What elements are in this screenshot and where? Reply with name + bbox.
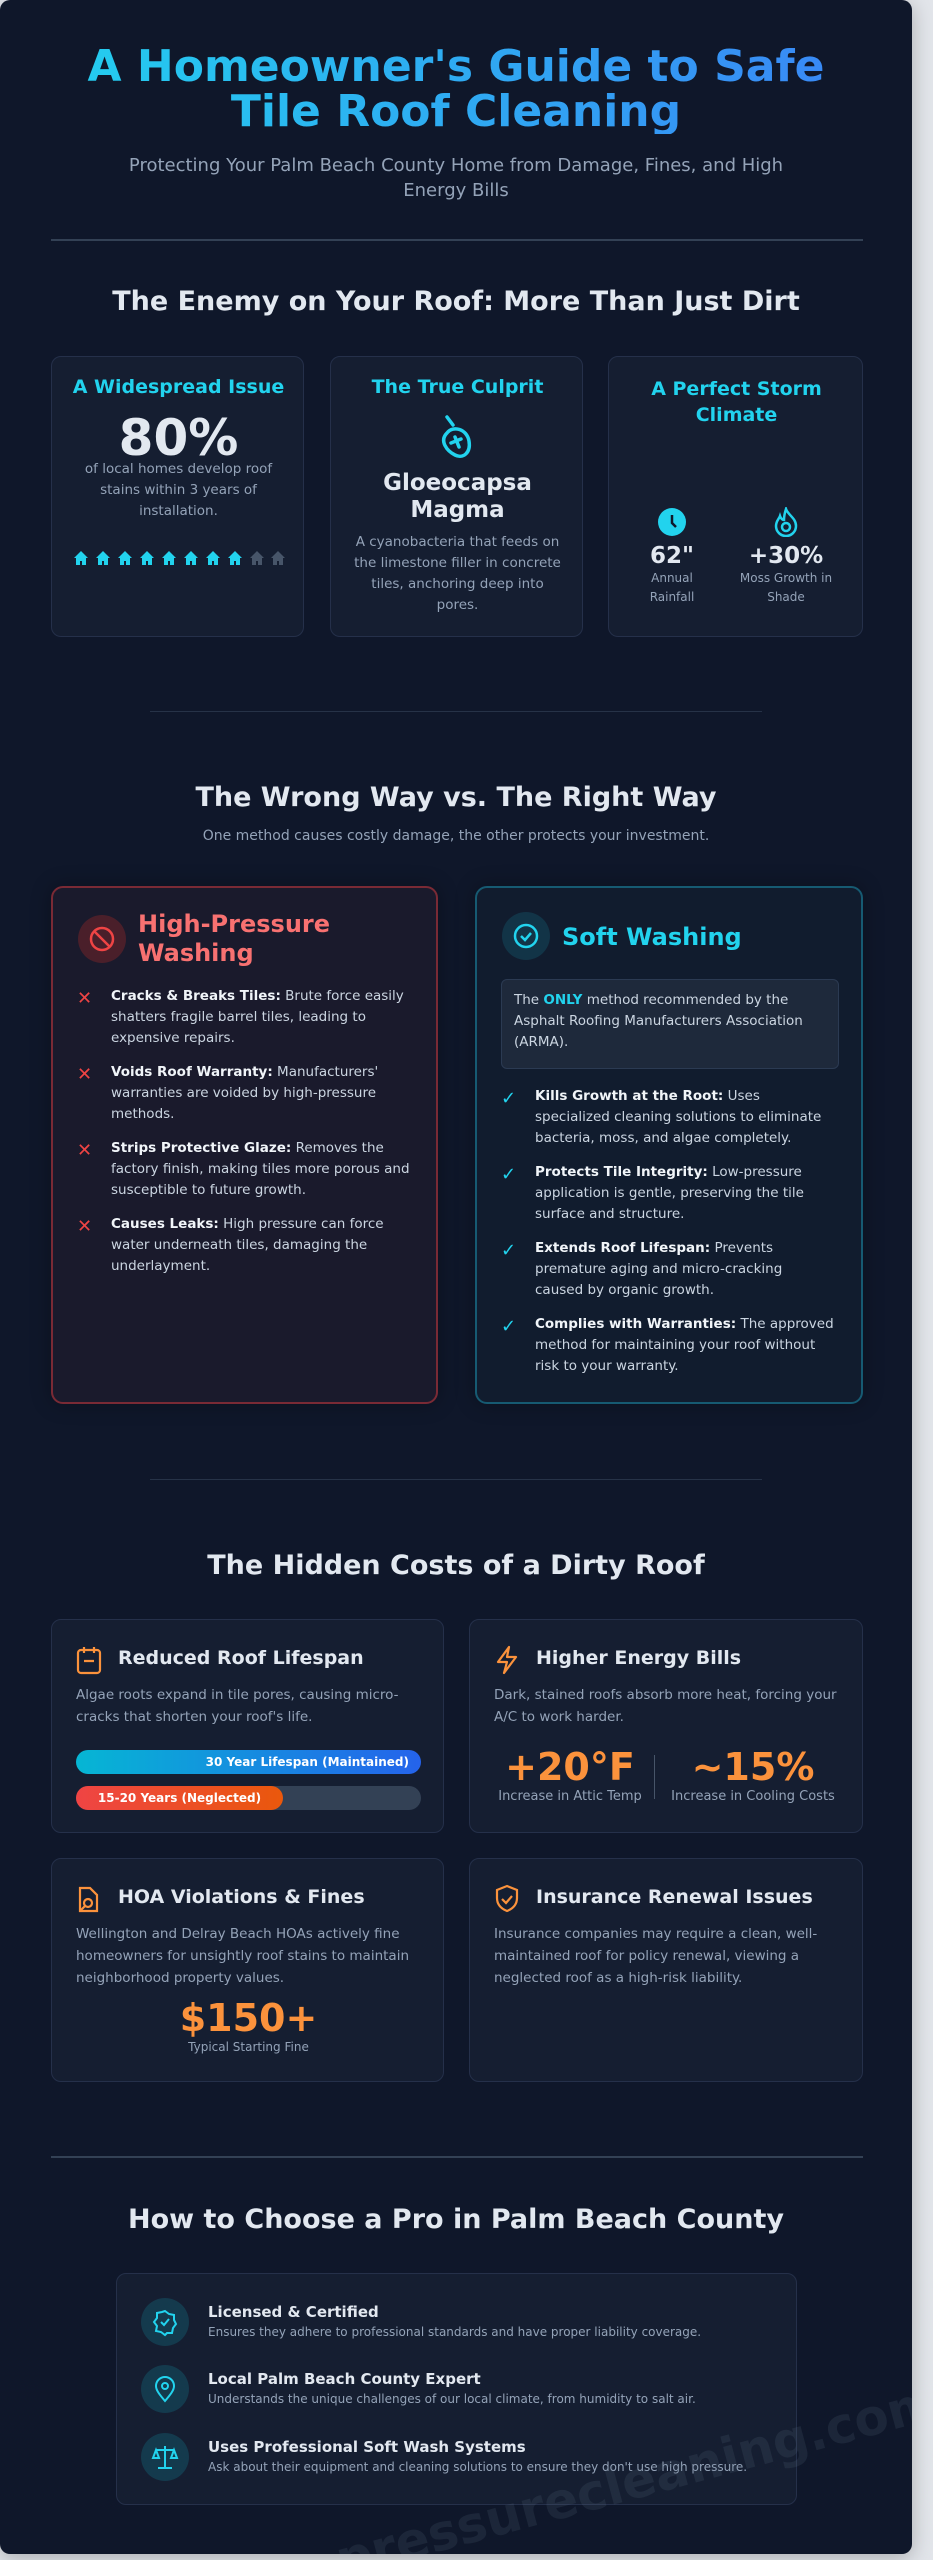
list xyxy=(501,1088,834,1374)
card: energy: Higher Energy Bills xyxy=(536,1647,741,1669)
card: widespread issue: of local homes develop roof stains within 3 years of installation. xyxy=(85,461,272,519)
panel: high-pressure: Cracks & Breaks Tiles: Brute force easily shatters fragile barrel tiles, leading to expensive repairs. xyxy=(111,988,404,1046)
stat: attic temp xyxy=(498,1745,642,1804)
panel: high-pressure: ✕ xyxy=(77,988,92,1009)
stat: cooling costs xyxy=(671,1745,835,1804)
heading: enemy: The Enemy on Your Roof: More Than Just Dirt xyxy=(112,286,800,317)
heading: Soft Washing xyxy=(562,923,742,951)
stat: moss growth xyxy=(740,507,832,604)
panel: high-pressure: Strips Protective Glaze: Removes the factory finish, making tiles more porous and susceptible to future growth. xyxy=(111,1140,410,1198)
panel: high-pressure: ✕ xyxy=(77,1064,92,1085)
bar: maintained xyxy=(76,1750,421,1774)
card: true culprit: Magma xyxy=(410,497,505,523)
panel: soft washing: ✓ xyxy=(501,1088,516,1109)
card: true culprit: The True Culprit xyxy=(372,376,543,398)
stat: moss growth: +30% xyxy=(749,543,823,569)
card: perfect storm: Climate xyxy=(696,404,777,426)
item: soft wash systems xyxy=(141,2433,747,2481)
card: widespread issue: A Widespread Issue xyxy=(73,376,284,398)
item: local expert: Understands the unique challenges of our local climate, from humidity to salt air. xyxy=(208,2392,696,2406)
stat: rainfall: Annual xyxy=(651,571,693,585)
item: licensed xyxy=(141,2298,701,2346)
bar: neglected: 15-20 Years (Neglected) xyxy=(98,1791,261,1805)
panel: high-pressure: ✕ xyxy=(77,1216,92,1237)
panel: soft washing xyxy=(475,886,863,1404)
stat: fine: $150+ xyxy=(180,1996,317,2040)
card: lifespan: Algae roots expand in tile pores, causing micro-cracks that shorten your roof's life. xyxy=(76,1687,399,1725)
bar: neglected xyxy=(76,1786,421,1810)
card: true culprit: Gloeocapsa xyxy=(383,470,532,496)
icon: calendar xyxy=(76,1647,102,1674)
card: insurance: Insurance Renewal Issues xyxy=(536,1886,813,1908)
card: true culprit xyxy=(330,356,583,637)
list xyxy=(77,988,410,1274)
card: HOA xyxy=(51,1858,444,2082)
card: widespread issue xyxy=(51,356,304,637)
card: lifespan xyxy=(51,1619,444,1833)
panel: high-pressure: Causes Leaks: High pressure can force water underneath tiles, damaging the underlayment. xyxy=(111,1216,384,1274)
panel: high-pressure xyxy=(51,886,438,1404)
card: lifespan: Reduced Roof Lifespan xyxy=(118,1647,364,1669)
card: energy: Dark, stained roofs absorb more heat, forcing your A/C to work harder. xyxy=(494,1687,837,1725)
stat: cooling costs: Increase in Cooling Costs xyxy=(671,1789,835,1804)
stat: moss growth: Moss Growth in xyxy=(740,571,832,585)
card: HOA: HOA Violations & Fines xyxy=(118,1886,365,1908)
card: insurance: Insurance companies may require a clean, well-maintained roof for policy renewal, viewing a neglected roof as a high-risk liability. xyxy=(494,1926,817,1986)
panel: high-pressure: Voids Roof Warranty: Manufacturers' warranties are voided by high-pressure methods. xyxy=(111,1064,378,1122)
icon row: houses xyxy=(74,551,285,565)
icon: check circle xyxy=(502,912,550,960)
heading: Washing xyxy=(138,939,254,967)
stat: rainfall: Rainfall xyxy=(650,590,694,604)
stat: rainfall xyxy=(650,508,694,604)
card: perfect storm xyxy=(608,356,863,637)
stat: attic temp: Increase in Attic Temp xyxy=(498,1789,642,1804)
title: Tile Roof Cleaning xyxy=(231,86,681,137)
stat: attic temp: +20°F xyxy=(505,1745,635,1789)
heading: High-Pressure xyxy=(138,910,330,938)
panel: soft washing: ✓ xyxy=(501,1164,516,1185)
panel: soft washing: Kills Growth at the Root: Uses specialized cleaning solutions to eliminate bacteria, moss, and algae completely. xyxy=(535,1088,821,1146)
title: A Homeowner's Guide to Safe xyxy=(88,41,824,92)
card: true culprit: A cyanobacteria that feeds on the limestone filler in concrete tiles, anchoring deep into pores. xyxy=(354,534,561,613)
card: HOA: Wellington and Delray Beach HOAs actively fine homeowners for unsightly roof stains to maintain neighborhood property values. xyxy=(76,1926,409,1986)
icon: bacteria xyxy=(442,415,472,458)
panel: soft washing: Extends Roof Lifespan: Prevents premature aging and micro-cracking caused by organic growth. xyxy=(535,1240,782,1298)
stat: cooling costs: ~15% xyxy=(692,1745,814,1789)
item: licensed: Licensed & Certified xyxy=(208,2303,379,2321)
item: soft wash systems: Uses Professional Soft Wash Systems xyxy=(208,2438,526,2456)
stat: moss growth: Shade xyxy=(767,590,805,604)
stat: fine: Typical Starting Fine xyxy=(188,2040,309,2054)
item: local expert xyxy=(141,2365,696,2413)
card: insurance xyxy=(469,1858,863,2082)
stat: rainfall: 62" xyxy=(650,543,694,569)
heading: hidden costs: The Hidden Costs of a Dirty Roof xyxy=(207,1550,705,1581)
title xyxy=(0,44,912,134)
card: perfect storm: A Perfect Storm xyxy=(651,378,822,400)
heading: wrong vs right: The Wrong Way vs. The Right Way xyxy=(195,782,717,813)
card: energy xyxy=(469,1619,863,1833)
callout: ARMA: The ONLY method recommended by the Asphalt Roofing Manufacturers Association (ARMA). xyxy=(514,992,803,1050)
panel: high-pressure: ✕ xyxy=(77,1140,92,1161)
bar: maintained: 30 Year Lifespan (Maintained) xyxy=(206,1755,409,1769)
item: local expert: Local Palm Beach County Expert xyxy=(208,2370,481,2388)
subtitle: Protecting Your Palm Beach County Home from Damage, Fines, and High Energy Bills xyxy=(129,155,783,201)
callout: ARMA xyxy=(501,979,839,1069)
item: licensed: Ensures they adhere to professional standards and have proper liability coverage. xyxy=(208,2325,701,2339)
card: widespread issue: 80% xyxy=(119,409,238,467)
subheading: One method causes costly damage, the other protects your investment. xyxy=(203,828,709,844)
panel: soft washing: Protects Tile Integrity: Low-pressure application is gentle, preserving the tile surface and structure. xyxy=(535,1164,804,1222)
item: soft wash systems: Ask about their equipment and cleaning solutions to ensure they don't use high pressure. xyxy=(208,2460,747,2474)
icon: shield xyxy=(496,1884,518,1912)
icon: lightning xyxy=(496,1646,518,1674)
heading xyxy=(138,910,330,967)
icon: document search xyxy=(78,1886,98,1912)
panel: soft washing: ✓ xyxy=(501,1240,516,1261)
panel: soft washing: ✓ xyxy=(501,1316,516,1337)
icon: prohibited xyxy=(78,915,126,963)
panel: checklist xyxy=(116,2273,797,2505)
panel: soft washing: Complies with Warranties: The approved method for maintaining your roof without risk to your warranty. xyxy=(535,1316,834,1374)
heading: choose a pro: How to Choose a Pro in Palm Beach County xyxy=(128,2204,784,2235)
